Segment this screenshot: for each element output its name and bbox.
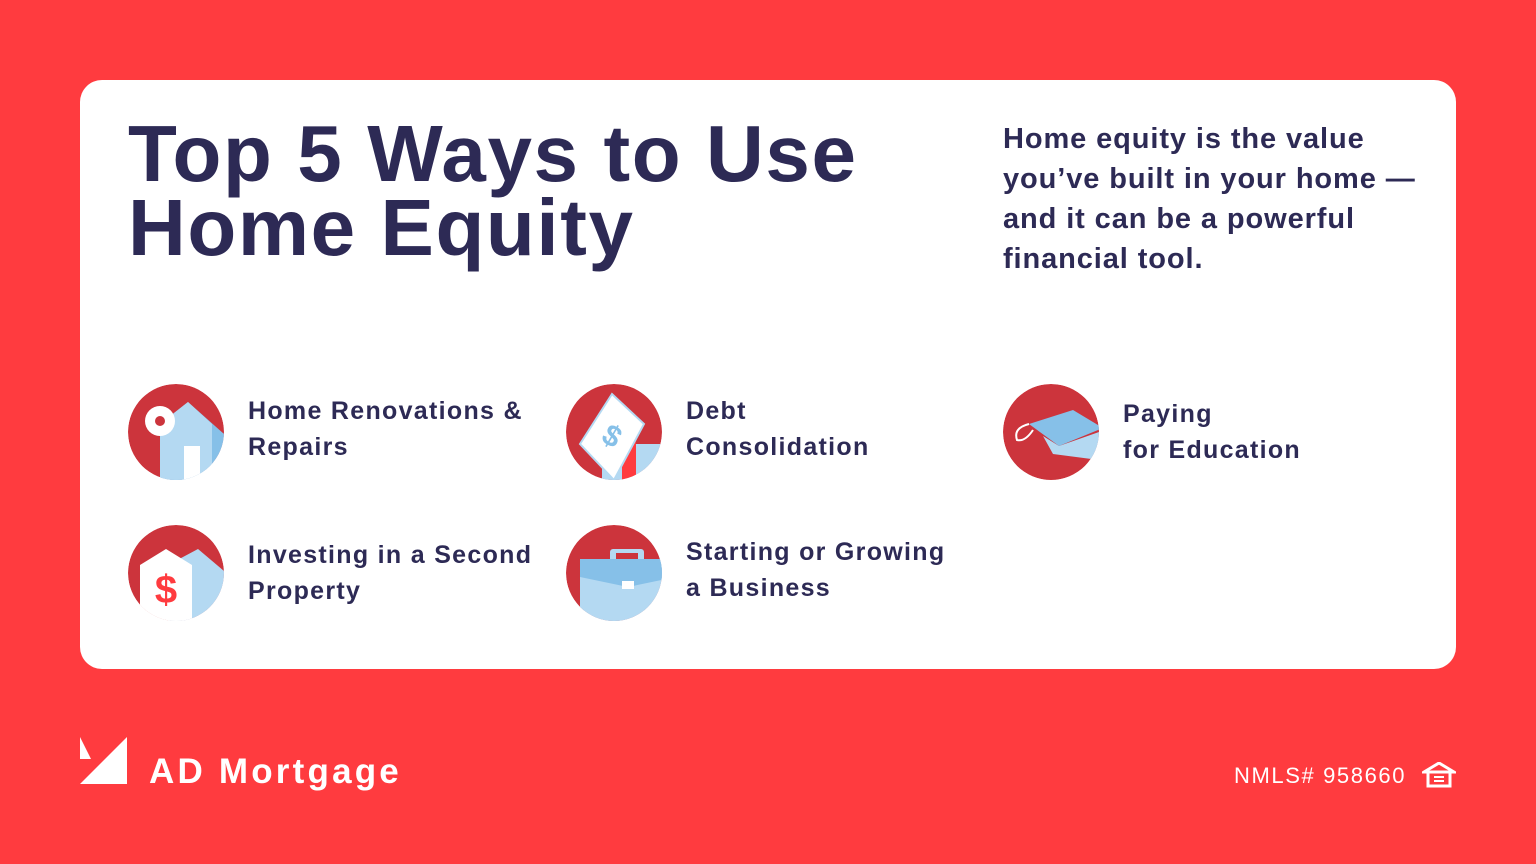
text: second property: [248, 541, 532, 605]
intro text: Home equity is the value: [1003, 123, 1365, 155]
text: debt consolidation: Debt: [686, 397, 747, 425]
intro text: you’ve built in your home —: [1003, 163, 1416, 195]
text: home renovations: Home Renovations &: [248, 397, 523, 425]
icon: second property: $: [155, 568, 177, 612]
text: home renovations: Repairs: [248, 433, 349, 461]
text: second property: Property: [248, 577, 361, 605]
title: Home Equity: [128, 183, 635, 272]
intro text: and it can be a powerful: [1003, 203, 1355, 235]
icon: home renovation: [128, 384, 224, 480]
NMLS footer: NMLS# 958660: [1234, 763, 1406, 788]
intro text: financial tool.: [1003, 243, 1203, 275]
text: business: Starting or Growing: [686, 538, 945, 566]
text: education: Paying: [1123, 400, 1213, 428]
text: business: a Business: [686, 574, 831, 602]
title: [128, 109, 858, 272]
card panel: [80, 80, 1456, 669]
text: education: for Education: [1123, 436, 1301, 464]
icon: business: [566, 525, 662, 621]
icon: education: [1003, 384, 1099, 480]
text: education: [1123, 400, 1301, 464]
intro text: [1003, 123, 1416, 275]
icon: equal housing: [1422, 762, 1456, 788]
logo: AD Mortgage: [149, 752, 402, 791]
text: home renovations: [248, 397, 523, 461]
icon: second property: [128, 525, 224, 621]
icon: debt consolidation: $: [596, 418, 627, 455]
text: second property: Investing in a Second: [248, 541, 532, 569]
logo: [80, 737, 402, 791]
text: debt consolidation: Consolidation: [686, 433, 870, 461]
icon: debt consolidation: [566, 384, 662, 480]
text: debt consolidation: [686, 397, 870, 461]
text: business: [686, 538, 945, 602]
title: Top 5 Ways to Use: [128, 109, 858, 198]
